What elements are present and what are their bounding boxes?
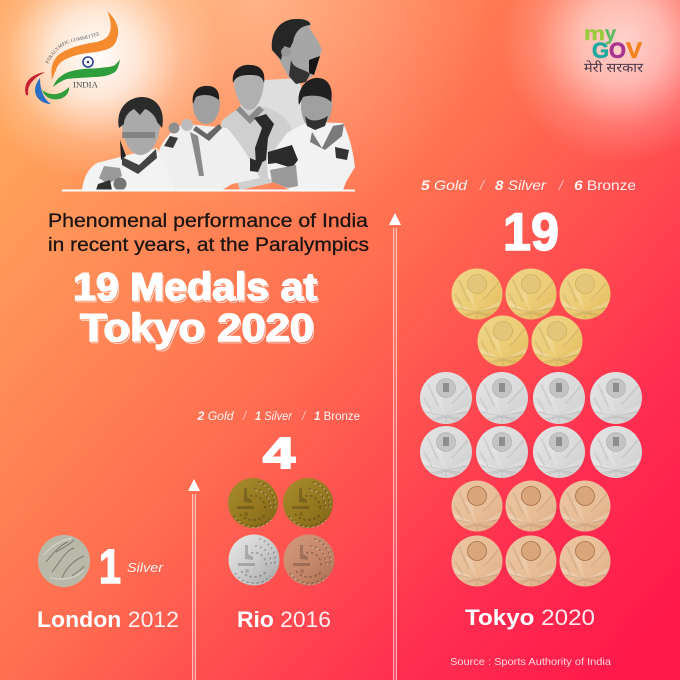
headline: 19 Medals at Tokyo 2020: 19 Medals at: [74, 268, 319, 311]
mygov: hindi tagline: मेरी सरकार: [584, 60, 644, 75]
medal: Rio silver: [228, 534, 280, 586]
arrow: Rio: [188, 479, 200, 680]
headline: 19 Medals at Tokyo 2020: Tokyo 2020: [80, 307, 314, 350]
breakdown text: /: [242, 411, 248, 423]
silver medals: [416, 372, 646, 478]
breakdown text: 5 Gold: [421, 177, 468, 193]
bronze medals: [447, 480, 615, 587]
label: Silver: Silver: [127, 560, 164, 575]
headline: 19 Medals at Tokyo 2020: 19 Medals at: [73, 266, 317, 309]
year label: Rio 2016: [237, 607, 331, 632]
intro text: [48, 211, 369, 256]
logo: green agito: [42, 87, 69, 99]
mygov logo: [584, 24, 644, 75]
logo: arc text: PARALYMPIC COMMITTEE: [45, 32, 100, 64]
arrow: Tokyo: [389, 213, 401, 680]
intro text: Phenomenal performance of India: [48, 211, 368, 232]
breakdown text: /: [301, 411, 307, 423]
mygov: my: [584, 24, 616, 45]
count: 1: 1: [99, 541, 121, 594]
count: 19: 19: [503, 203, 559, 262]
year label: Tokyo 2020: [465, 605, 595, 630]
mygov: my: m: [584, 24, 605, 45]
section: Tokyo 2020: [416, 177, 646, 630]
breakdown text: /: [479, 177, 486, 193]
intro text: in recent years, at the Paralympics: [48, 235, 369, 256]
breakdown text: 8 Silver: [495, 177, 547, 193]
mygov: GOV: [592, 38, 642, 63]
logo: green ribbon: [53, 59, 120, 87]
source note: Source : Sports Authority of India: [450, 656, 611, 668]
athlete: shouting man: [236, 19, 322, 160]
medal: Rio gold 2: [283, 478, 333, 528]
count: 4: 4: [263, 429, 296, 478]
breakdown text: 1 Bronze: [314, 411, 360, 423]
athlete: bearded man: [267, 78, 355, 190]
athlete: centre man: [221, 65, 292, 190]
medal: Rio bronze: [284, 534, 334, 586]
athlete: man with medal: [157, 86, 262, 190]
breakdown text: 2 Gold: [196, 411, 234, 423]
breakdown text: 6 Bronze: [574, 177, 636, 193]
section: London 2012: [37, 535, 179, 632]
logo: saffron ribbon: [51, 11, 118, 80]
breakdown text: [421, 177, 636, 193]
breakdown text: [196, 411, 360, 423]
breakdown text: /: [558, 177, 565, 193]
mygov: GOV: O: [609, 38, 626, 63]
athlete: woman: [82, 97, 176, 190]
photo group of medal winners: [82, 19, 355, 190]
photo base line: [62, 190, 355, 192]
mygov: GOV: V: [626, 38, 642, 63]
logo: red agito: [25, 72, 45, 95]
logo: Paralympic Committee of India: [25, 11, 120, 104]
year label: London 2012: [37, 607, 179, 632]
logo: India text: INDIA: [73, 80, 98, 90]
logo: blue agito: [35, 78, 51, 104]
medal: Rio gold 1: [228, 478, 278, 528]
medal: London silver: [38, 535, 90, 587]
breakdown text: 1 Silver: [255, 411, 293, 423]
section: Rio 2016: [196, 411, 360, 632]
headline: 19 Medals at Tokyo 2020: [73, 266, 319, 352]
gold medals: [447, 268, 615, 367]
mygov: GOV: G: [592, 38, 609, 63]
headline: 19 Medals at Tokyo 2020: Tokyo 2020: [82, 309, 316, 352]
mygov: my: y: [605, 24, 616, 45]
logo: ashoka chakra: [83, 57, 93, 67]
